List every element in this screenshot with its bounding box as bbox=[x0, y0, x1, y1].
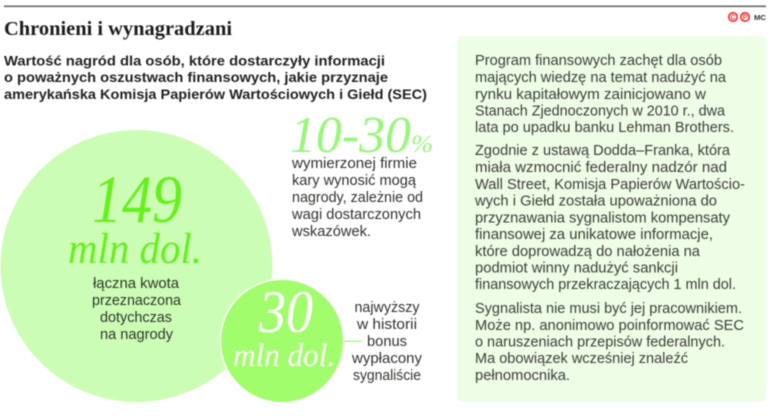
paragraph: Dodd-Frank act: Wall Street, Komisja Papierów Wartościo- bbox=[475, 177, 745, 193]
caption: total amount: na nagrody bbox=[100, 327, 174, 343]
caption: highest bonus: wypłacony bbox=[351, 351, 423, 367]
paragraph: Dodd-Frank act: podmiot winny nadużyć sankcji bbox=[475, 260, 678, 276]
subtitle bbox=[4, 52, 427, 102]
subtitle: o poważnych oszustwach finansowych, jakie przyznaje bbox=[4, 69, 388, 85]
paragraph: Dodd-Frank act: które doprowadzą do nałożenia na bbox=[475, 244, 701, 260]
large circle: total awards bbox=[0, 130, 272, 402]
icon: copyright and press marks: MC bbox=[754, 15, 766, 22]
caption: total amount: łączna kwota bbox=[93, 276, 180, 292]
caption: highest bonus: najwyższy bbox=[354, 300, 420, 316]
figure: 149 million dollars bbox=[68, 161, 202, 273]
subtitle: Wartość nagród dla osób, które dostarczyły informacji bbox=[4, 52, 385, 68]
paragraph: Dodd-Frank act: finansowych przekraczających 1 mln dol. bbox=[475, 277, 736, 293]
paragraph: Dodd-Frank act: finansowej za unikatowe informacje, bbox=[475, 227, 713, 243]
subtitle: amerykańska Komisja Papierów Wartościowych i Giełd (SEC) bbox=[4, 86, 427, 102]
paragraph: whistleblower rules: Ma obowiązek wcześniej znaleźć bbox=[475, 351, 688, 367]
figure: 30 million dollars bbox=[233, 279, 335, 374]
paragraph: Dodd-Frank act: wych i Giełd została upoważniona do bbox=[474, 194, 717, 210]
figure: 30 million dollars: mln dol. bbox=[233, 338, 335, 374]
paragraph: program origin bbox=[475, 53, 734, 136]
paragraph: Dodd-Frank act: miała wzmocnić federalny nadzór nad bbox=[475, 160, 727, 176]
caption: fine share: nagrody, zależnie od bbox=[292, 190, 423, 206]
caption: highest bonus bbox=[351, 300, 423, 384]
icon: copyright and press marks bbox=[729, 13, 766, 22]
caption: highest bonus: w historii bbox=[356, 317, 417, 333]
paragraph: Dodd-Frank act: Zgodnie z ustawą Dodda–Franka, która bbox=[475, 143, 731, 159]
icon: copyright and press marks: P bbox=[743, 14, 748, 22]
paragraph: whistleblower rules: o naruszeniach przepisów federalnych. bbox=[475, 334, 725, 350]
paragraph: Dodd-Frank act bbox=[474, 143, 745, 293]
panel: explanation text bbox=[457, 36, 766, 402]
paragraph: whistleblower rules: Może np. anonimowo poinformować SEC bbox=[475, 318, 744, 334]
paragraph: program origin: Stanach Zjednoczonych w 2010 r., dwa bbox=[475, 104, 726, 120]
stat: 10-30 percent: % bbox=[411, 131, 433, 158]
caption: highest bonus: bonus bbox=[367, 334, 407, 350]
caption: fine share: kary wynosić mogą bbox=[292, 173, 417, 189]
caption: fine share: wymierzonej firmie bbox=[291, 156, 417, 172]
paragraph: Dodd-Frank act: przyznawania sygnalistom kompensaty bbox=[475, 210, 731, 226]
caption: total amount bbox=[92, 276, 182, 343]
stat: 10-30 percent: 10-30 bbox=[290, 107, 411, 164]
paragraph: whistleblower rules bbox=[475, 301, 744, 384]
paragraph: whistleblower rules: pełnomocnika. bbox=[475, 368, 570, 384]
caption: highest bonus: sygnaliście bbox=[353, 368, 421, 384]
caption: fine share: wagi dostarczonych bbox=[291, 207, 421, 223]
caption: total amount: przeznaczona bbox=[92, 293, 182, 309]
stat: 10-30 percent bbox=[290, 107, 433, 240]
caption: total amount: dotychczas bbox=[100, 310, 172, 326]
figure: 149 million dollars: 149 bbox=[92, 161, 182, 237]
small circle: highest bonus bbox=[220, 278, 344, 404]
paragraph: program origin: mających wiedzę na temat nadużyć na bbox=[475, 70, 727, 86]
icon: copyright and press marks: C bbox=[730, 14, 736, 22]
connector line bbox=[344, 340, 362, 342]
paragraph: program origin: Program finansowych zachęt dla osób bbox=[475, 53, 722, 69]
figure: 30 million dollars: 30 bbox=[258, 279, 313, 345]
paragraph: program origin: rynku kapitałowym zainicjowano w bbox=[475, 87, 707, 103]
title: Chronieni i wynagradzani bbox=[4, 18, 232, 40]
figure: 149 million dollars: mln dol. bbox=[68, 226, 202, 273]
paragraph: program origin: lata po upadku banku Lehman Brothers. bbox=[475, 120, 734, 136]
caption: fine share: wskazówek. bbox=[291, 224, 371, 240]
caption: fine share bbox=[291, 156, 423, 240]
paragraph: whistleblower rules: Sygnalista nie musi być jej pracownikiem. bbox=[475, 301, 742, 317]
